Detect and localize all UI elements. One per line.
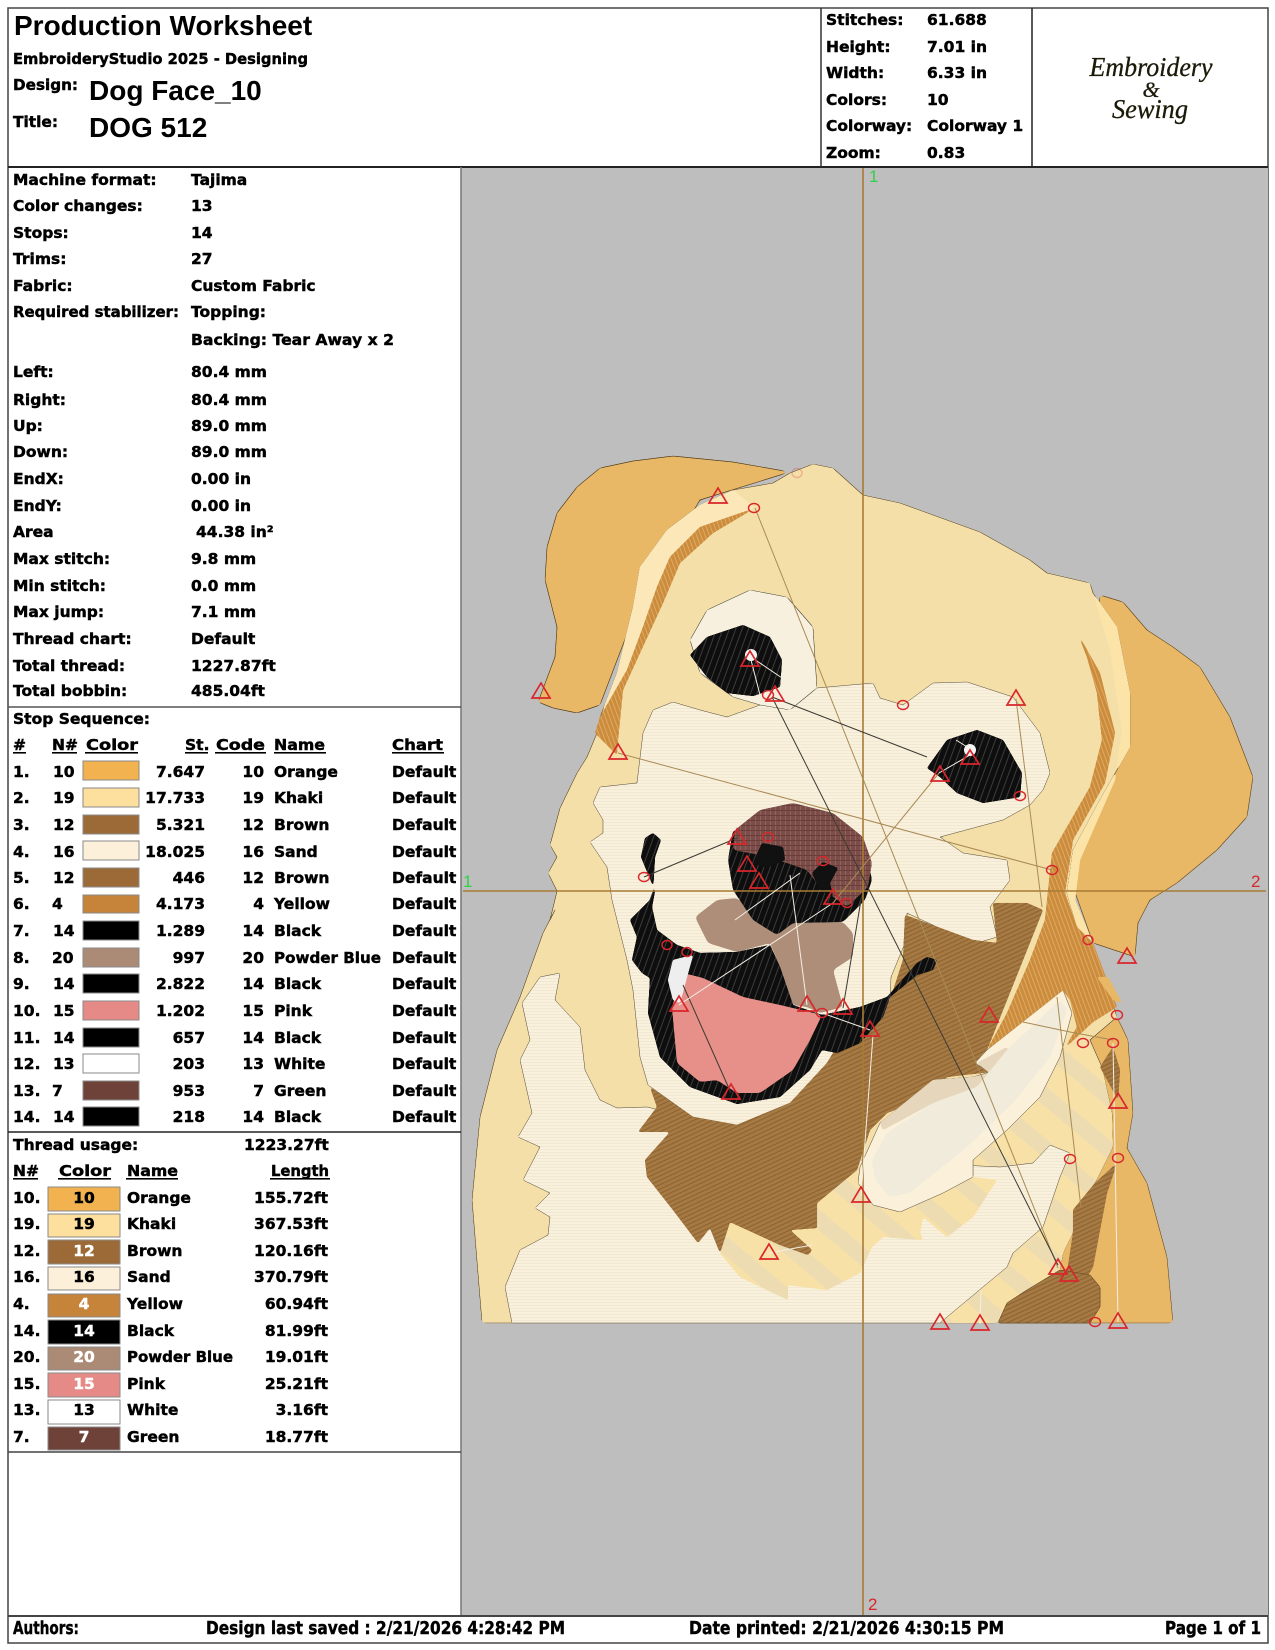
stop rows: 14 [53, 922, 75, 940]
thread rows: 81.99ft [265, 1322, 329, 1340]
panel: machine and design properties: Down: [13, 443, 68, 461]
stop rows: 20 [242, 949, 264, 967]
brown chest [638, 903, 1043, 1255]
small brown sliver [1100, 1047, 1120, 1100]
stop rows: 1. [13, 763, 30, 781]
table header row: Code [216, 736, 265, 754]
stop rows: 997 [173, 949, 205, 967]
stop rows: 15 [242, 1002, 264, 1020]
paw cream [858, 990, 1072, 1212]
table header row: Color [86, 736, 138, 754]
left ear ridge [595, 508, 755, 755]
thread rows: 15 [73, 1375, 95, 1393]
stop rows: Black [274, 922, 322, 940]
paw inner oval [872, 1000, 1067, 1197]
stop rows: Black [274, 975, 322, 993]
stop rows: White [274, 1055, 325, 1073]
thread table header row: Name [127, 1162, 178, 1180]
thread rows: 7 [79, 1428, 89, 1446]
stop rows: 5.321 [156, 816, 205, 834]
stop rows: 19 [242, 789, 264, 807]
stop rows: 2. [13, 789, 30, 807]
thread rows: 10. [13, 1189, 40, 1207]
panel: design stats: 7.01 in [927, 38, 987, 56]
table header row: St. [185, 736, 209, 754]
table header row: # [13, 736, 26, 754]
stop rows: Default [392, 763, 457, 781]
panel: machine and design properties: 7.1 mm [191, 603, 256, 621]
panel: machine and design properties: Fabric: [13, 277, 73, 295]
thread rows: 3.16ft [276, 1401, 329, 1419]
panel: design preview background [461, 167, 1268, 1616]
nose black [728, 830, 872, 935]
thread rows: 16. [13, 1268, 40, 1286]
thread rows: 155.72ft [254, 1189, 329, 1207]
title: Production Worksheet [14, 10, 312, 41]
tongue highlight [668, 955, 693, 1003]
thread usage heading [13, 1136, 329, 1154]
stop rows: 14 [242, 922, 264, 940]
panel: machine and design properties: Up: [13, 417, 43, 435]
thread rows: 367.53ft [254, 1215, 329, 1233]
left ear [538, 456, 790, 713]
khaki striped lobe right [940, 1047, 1113, 1323]
stop rows: Default [392, 1029, 457, 1047]
thread rows: Sand [127, 1268, 171, 1286]
thread rows: Powder Blue [127, 1348, 233, 1366]
logo: Embroidery and Sewing: Embroidery [1089, 52, 1213, 82]
date printed: Date printed: 2/21/2026 4:30:15 PM [689, 1618, 1004, 1639]
panel: design stats: Colors: [826, 91, 887, 109]
stop rows [13, 761, 457, 1126]
thread rows [13, 1187, 329, 1450]
stop rows: Default [392, 843, 457, 861]
panel: machine and design properties: 0.0 mm [191, 577, 256, 595]
panel: machine and design properties: Stops: [13, 224, 69, 242]
stop rows: Khaki [274, 789, 323, 807]
stop rows: 14 [242, 975, 264, 993]
right ear [1060, 595, 1253, 957]
stop rows: Default [392, 1002, 457, 1020]
stop rows: Default [392, 816, 457, 834]
thread rows: 12. [13, 1242, 40, 1260]
table header row: Name [274, 736, 325, 754]
left eye surround [690, 590, 817, 710]
stop rows: 7 [52, 1082, 63, 1100]
stop rows: 203 [173, 1055, 205, 1073]
thread table header row: N# [13, 1162, 39, 1180]
stop rows: Pink [274, 1002, 313, 1020]
panel: machine and design properties: Topping: [191, 303, 266, 321]
thread rows: 15. [13, 1375, 40, 1393]
stop rows: 13 [242, 1055, 264, 1073]
stop rows: Default [392, 1108, 457, 1126]
stop rows: 218 [173, 1108, 205, 1126]
panel: design stats: 6.33 in [927, 64, 987, 82]
axis labels: 1 [463, 872, 472, 891]
authors: Authors: [13, 1618, 79, 1639]
panel: design stats [826, 11, 1023, 162]
stop rows: 657 [173, 1029, 205, 1047]
panel: machine and design properties: Total bobbin: [13, 682, 127, 700]
thread rows: Yellow [126, 1295, 183, 1313]
panel: machine and design properties: Trims: [13, 250, 66, 268]
stop markers: triangles [532, 488, 1136, 1330]
panel: design stats: Colorway 1 [927, 117, 1023, 135]
panel: design stats: Width: [826, 64, 884, 82]
panel: machine and design properties: Thread chart: [13, 630, 132, 648]
jump stitch lines [618, 508, 1118, 1324]
paw beige shade [880, 1047, 1010, 1130]
thread rows: Orange [127, 1189, 191, 1207]
panel: machine and design properties: Required stabilizer: [13, 303, 179, 321]
thread rows: 14. [13, 1322, 40, 1340]
stop rows: 12 [53, 869, 75, 887]
stop rows: Default [392, 949, 457, 967]
thread rows: 120.16ft [254, 1242, 329, 1260]
panel: machine and design properties: 13 [191, 197, 213, 215]
stop rows: 14 [53, 1029, 75, 1047]
thread rows: Pink [127, 1375, 166, 1393]
axis labels [463, 167, 1260, 1614]
panel: machine and design properties: 0.00 in [191, 497, 251, 515]
panel: design stats: 10 [927, 91, 949, 109]
design name: Dog Face_10 [89, 75, 262, 106]
thread rows: 60.94ft [265, 1295, 329, 1313]
thread rows: 25.21ft [265, 1375, 329, 1393]
stop rows: 4. [13, 843, 30, 861]
panel: machine and design properties: 80.4 mm [191, 363, 267, 381]
axis labels: 2 [868, 1595, 877, 1614]
illustration: embroidered dog [472, 456, 1253, 1323]
table header row: Chart [392, 736, 444, 754]
thread rows: Black [127, 1322, 175, 1340]
panel: machine and design properties: EndY: [13, 497, 62, 515]
axis labels: 2 [1251, 872, 1260, 891]
panel: machine and design properties: 9.8 mm [191, 550, 256, 568]
panel: thread usage table [13, 1136, 330, 1450]
stop rows: Sand [274, 843, 318, 861]
thread rows: 370.79ft [254, 1268, 329, 1286]
logo: Embroidery and Sewing [1089, 52, 1213, 124]
thread rows: 16 [73, 1268, 95, 1286]
nose bridge brown [733, 803, 872, 907]
stop rows: 12 [242, 869, 264, 887]
face cream [590, 682, 1050, 1125]
tongue [672, 973, 822, 1093]
stop rows: 10 [242, 763, 264, 781]
panel: machine and design properties: Tajima [191, 171, 247, 189]
stop sequence heading: Stop Sequence: [13, 710, 150, 728]
stop rows: Default [392, 975, 457, 993]
stop rows: 17.733 [145, 789, 205, 807]
muzzle powder shading [695, 898, 853, 1013]
thread rows: 20. [13, 1348, 40, 1366]
panel: machine and design properties: Area [13, 523, 54, 541]
design label: Design: [13, 76, 78, 94]
stop rows: 13. [13, 1082, 40, 1100]
logo: Embroidery and Sewing: Sewing [1112, 94, 1188, 124]
stop rows: 11. [13, 1029, 40, 1047]
software name: EmbroideryStudio 2025 - Designing [13, 50, 308, 68]
stop rows: 6. [13, 895, 30, 913]
stop rows: 10 [53, 763, 75, 781]
right eye [927, 730, 1022, 803]
panel: machine and design properties: Machine format: [13, 171, 157, 189]
stop rows: Default [392, 789, 457, 807]
panel: machine and design properties: Right: [13, 391, 66, 409]
right nostril [812, 862, 838, 897]
stop rows: 14 [242, 1108, 264, 1126]
stop rows: Brown [274, 816, 329, 834]
stop rows: 4 [52, 895, 63, 913]
stop rows: 12. [13, 1055, 40, 1073]
stop rows: Brown [274, 869, 329, 887]
table header row: N# [52, 736, 78, 754]
panel: machine and design properties: Custom Fabric [191, 277, 316, 295]
thread rows: Khaki [127, 1215, 176, 1233]
stop rows: 14 [242, 1029, 264, 1047]
thread rows: 19. [13, 1215, 40, 1233]
stop rows: 15 [53, 1002, 75, 1020]
stop rows: 12 [242, 816, 264, 834]
thread rows: Brown [127, 1242, 182, 1260]
stop rows: 14. [13, 1108, 40, 1126]
panel: design stats: 61.688 [927, 11, 987, 29]
thread table header row: Length [271, 1162, 329, 1180]
thread rows: 7. [13, 1428, 30, 1446]
stop rows: 3. [13, 816, 30, 834]
panel: machine and design properties: 14 [191, 224, 213, 242]
panel: design stats: Zoom: [826, 144, 881, 162]
stop rows: 19 [53, 789, 75, 807]
panel: machine and design properties: 89.0 mm [191, 417, 267, 435]
panel: machine and design properties: Color changes: [13, 197, 143, 215]
stop rows: Powder Blue [274, 949, 381, 967]
left eye [690, 625, 782, 696]
brown strip right [1067, 1163, 1117, 1277]
yoke and ear ridge [987, 632, 1117, 1050]
panel: machine and design properties: 89.0 mm [191, 443, 267, 461]
panel: design stats: Stitches: [826, 11, 903, 29]
panel: machine and design properties: Total thread: [13, 657, 125, 675]
mouth and whisker black [630, 833, 937, 1104]
thread rows: 19 [73, 1215, 95, 1233]
thread rows: 18.77ft [265, 1428, 329, 1446]
stop rows: 12 [53, 816, 75, 834]
design last saved: Design last saved : 2/21/2026 4:28:42 PM [206, 1618, 565, 1639]
thread usage heading: 1223.27ft [244, 1136, 329, 1154]
panel: machine and design properties: Left: [13, 363, 54, 381]
orange body right [1040, 1017, 1173, 1323]
stop rows: Yellow [273, 895, 330, 913]
stop rows: 7. [13, 922, 30, 940]
table header row [13, 736, 444, 754]
stop rows: Default [392, 895, 457, 913]
stop rows: 7.647 [156, 763, 205, 781]
stop rows: 14 [53, 1108, 75, 1126]
design title: DOG 512 [89, 112, 207, 143]
thread rows: Green [127, 1428, 179, 1446]
stop rows: 10. [13, 1002, 40, 1020]
light ridge left [600, 490, 755, 717]
thread rows: 19.01ft [265, 1348, 329, 1366]
thread rows: 4 [79, 1295, 90, 1313]
eye highlights [745, 649, 976, 756]
sand chest body [505, 973, 1070, 1323]
stop rows: 1.202 [156, 1002, 205, 1020]
thread rows: 4. [13, 1295, 30, 1313]
stop rows: Default [392, 869, 457, 887]
panel: machine and design properties: Max jump: [13, 603, 104, 621]
thread rows: 12 [73, 1242, 95, 1260]
panel: machine and design properties: Default [191, 630, 256, 648]
panel: machine and design properties: Min stitch: [13, 577, 106, 595]
stop rows: 4.173 [156, 895, 205, 913]
thread rows: 10 [73, 1189, 95, 1207]
stop rows: Black [274, 1108, 322, 1126]
panel: design stats: 0.83 [927, 144, 965, 162]
panel: machine and design properties: 1227.87ft [191, 657, 276, 675]
stop rows: Orange [274, 763, 338, 781]
footer [13, 1618, 1261, 1639]
stop rows: 20 [52, 949, 74, 967]
stop rows: 16 [242, 843, 264, 861]
thread rows: 13 [73, 1401, 95, 1419]
thread rows: 13. [13, 1401, 40, 1419]
panel: design stats: Colorway: [826, 117, 912, 135]
thread table header row: Color [59, 1162, 111, 1180]
crosshair axes [463, 167, 1266, 1616]
stop rows: 18.025 [145, 843, 205, 861]
stop rows: 14 [53, 975, 75, 993]
stop rows: 5. [13, 869, 30, 887]
small orange tab [1097, 977, 1122, 1003]
stop rows: Default [392, 1082, 457, 1100]
axis labels: 1 [869, 167, 878, 186]
panel: design stats: Height: [826, 38, 891, 56]
stop rows: Default [392, 922, 457, 940]
panel: header [13, 10, 312, 143]
panel: machine and design properties: 44.38 in² [196, 523, 274, 541]
logo: Embroidery and Sewing: & [1142, 77, 1160, 102]
panel: machine and design properties: 0.00 in [191, 470, 251, 488]
panel: machine and design properties: 485.04ft [191, 682, 266, 700]
khaki neck patch [720, 1160, 997, 1300]
thread rows: 14 [73, 1322, 95, 1340]
left nostril [753, 843, 785, 868]
stop rows: 1.289 [156, 922, 205, 940]
panel: stop sequence table [13, 710, 457, 1126]
stop rows: 8. [13, 949, 30, 967]
stop rows: 16 [53, 843, 75, 861]
panel: machine and design properties [13, 171, 394, 700]
stop rows: Default [392, 1055, 457, 1073]
stop markers: circles [638, 468, 1124, 1326]
khaki head and body [472, 464, 1130, 1323]
title label: Title: [13, 113, 58, 131]
light ridge right [1067, 593, 1130, 943]
thread usage heading: Thread usage: [13, 1136, 138, 1154]
stop rows: 7 [253, 1082, 264, 1100]
panel: machine and design properties: 27 [191, 250, 213, 268]
thread rows: White [127, 1401, 178, 1419]
stop rows: 4 [253, 895, 264, 913]
panel: machine and design properties: Backing: Tear Away x 2 [191, 331, 394, 349]
thread rows: 20 [73, 1348, 95, 1366]
brown block bottom [998, 1270, 1100, 1323]
thread table header row [13, 1162, 330, 1180]
stop rows: 446 [173, 869, 205, 887]
stop rows: 2.822 [156, 975, 205, 993]
stop rows: Black [274, 1029, 322, 1047]
stop rows: 13 [53, 1055, 75, 1073]
stop rows: 9. [13, 975, 30, 993]
panel: machine and design properties: EndX: [13, 470, 64, 488]
panel: machine and design properties: Max stitch: [13, 550, 110, 568]
stop rows: 953 [173, 1082, 205, 1100]
panel: machine and design properties: 80.4 mm [191, 391, 267, 409]
stop rows: Green [274, 1082, 326, 1100]
